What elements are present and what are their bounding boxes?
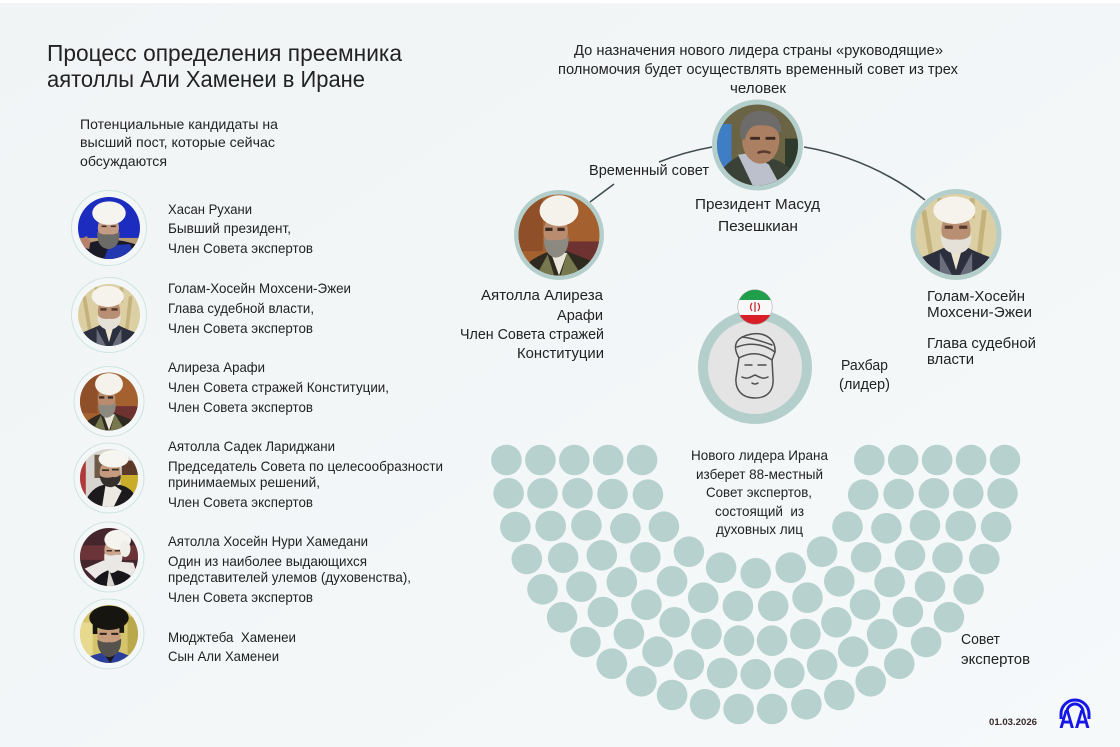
connector arc: temporary council bbox=[590, 147, 925, 202]
title: Процесс определения преемника bbox=[47, 40, 402, 66]
candidate: Arafi: Член Совета экспертов bbox=[168, 399, 313, 415]
text: assembly of experts description: состоящий из bbox=[715, 503, 804, 519]
caption: Pezeshkian: Президент Масуд bbox=[695, 196, 820, 213]
candidate: Rouhani: Хасан Рухани bbox=[168, 201, 252, 217]
text: assembly of experts description: изберет 88-местный bbox=[696, 466, 823, 482]
candidate: Ejei: Голам-Хосейн Мохсени-Эжеи bbox=[168, 280, 351, 296]
candidate: Rouhani bbox=[72, 190, 313, 266]
intro text: candidates bbox=[80, 116, 278, 169]
caption: Ejei bbox=[927, 288, 1036, 368]
logo: Anadolu Agency: AA bbox=[1059, 704, 1090, 734]
portrait: Arafi bbox=[514, 190, 604, 280]
candidate: Nuri Hamedani: представителей улемов (духовенства), bbox=[168, 569, 411, 585]
text: assembly of experts description bbox=[691, 447, 828, 537]
icon: supreme leader bbox=[703, 315, 807, 419]
title bbox=[47, 40, 402, 92]
label: assembly of experts bbox=[961, 631, 1030, 668]
portrait: Pezeshkian bbox=[712, 100, 803, 190]
candidate: Ejei: Член Совета экспертов bbox=[168, 320, 313, 336]
text: assembly of experts description: Нового лидера Ирана bbox=[691, 447, 828, 463]
candidate: Mojtaba Khamenei: Мюджтеба Хаменеи bbox=[168, 629, 296, 645]
caption: Ejei: Голам-Хосейн bbox=[927, 288, 1025, 305]
caption: Arafi: Член Совета стражей bbox=[460, 326, 604, 343]
label: leader bbox=[839, 357, 890, 393]
chart: 88 seats of the assembly of experts bbox=[491, 445, 1020, 724]
label: leader: (лидер) bbox=[839, 376, 890, 393]
candidate: Larijani: Член Совета экспертов bbox=[168, 494, 313, 510]
candidate: Arafi: Член Совета стражей Конституции, bbox=[168, 379, 389, 395]
candidate: Rouhani: Бывший президент, bbox=[168, 220, 291, 236]
caption: Arafi: Арафи bbox=[557, 307, 603, 324]
text: assembly of experts description: духовных лиц bbox=[716, 521, 803, 537]
title: аятоллы Али Хаменеи в Иране bbox=[47, 66, 365, 92]
intro text: temporary council: До назначения нового лидера страны «руководящие» bbox=[574, 42, 943, 59]
candidate: Nuri Hamedani: Член Совета экспертов bbox=[168, 589, 313, 605]
candidate: Nuri Hamedani: Аятолла Хосейн Нури Хамедани bbox=[168, 533, 368, 549]
candidate: Mojtaba Khamenei: Сын Али Хаменеи bbox=[168, 648, 279, 664]
intro text: candidates: обсуждаются bbox=[80, 153, 167, 169]
candidate: Larijani: принимаемых решений, bbox=[168, 474, 320, 490]
intro text: temporary council bbox=[558, 42, 958, 97]
caption: Arafi: Аятолла Алиреза bbox=[481, 287, 604, 304]
caption: Ejei: Глава судебной bbox=[927, 335, 1036, 352]
caption: Arafi: Конституции bbox=[517, 345, 604, 362]
caption: Pezeshkian bbox=[695, 196, 820, 235]
caption: Ejei: Мохсени-Эжеи bbox=[927, 304, 1032, 321]
icon: flag of Iran bbox=[737, 289, 773, 325]
candidate: Rouhani: Член Совета экспертов bbox=[168, 240, 313, 256]
caption: Arafi bbox=[460, 287, 604, 362]
candidate: Arafi: Алиреза Арафи bbox=[168, 359, 265, 375]
panel: candidates list bbox=[72, 190, 443, 669]
caption: Ejei: власти bbox=[927, 351, 974, 368]
candidate: Larijani: Аятолла Садек Лариджани bbox=[168, 438, 335, 454]
portrait: Ejei bbox=[910, 189, 1002, 280]
candidate: Ejei: Глава судебной власти, bbox=[168, 300, 314, 316]
label: assembly of experts: Совет bbox=[961, 631, 1000, 648]
text: assembly of experts description: Совет экспертов, bbox=[706, 484, 812, 500]
date: 01.03.2026 bbox=[989, 717, 1037, 727]
intro text: temporary council: человек bbox=[730, 80, 786, 97]
candidate: Nuri Hamedani bbox=[74, 522, 411, 605]
candidate: Nuri Hamedani: Один из наиболее выдающихся bbox=[168, 553, 367, 569]
label: temporary council: Временный совет bbox=[589, 162, 709, 179]
candidate: Mojtaba Khamenei bbox=[74, 599, 296, 669]
intro text: candidates: Потенциальные кандидаты на bbox=[80, 116, 278, 132]
label: leader: Рахбар bbox=[841, 357, 888, 374]
caption: Pezeshkian: Пезешкиан bbox=[718, 218, 798, 235]
intro text: temporary council: полномочия будет осуществлять временный совет из трех bbox=[558, 61, 958, 78]
candidate: Arafi bbox=[74, 359, 389, 436]
candidate: Larijani: Председатель Совета по целесообразности bbox=[168, 458, 443, 474]
label: assembly of experts: экспертов bbox=[961, 651, 1030, 668]
candidate: Ejei bbox=[72, 278, 351, 352]
intro text: candidates: высший пост, которые сейчас bbox=[80, 134, 275, 150]
candidate: Larijani bbox=[74, 438, 443, 513]
